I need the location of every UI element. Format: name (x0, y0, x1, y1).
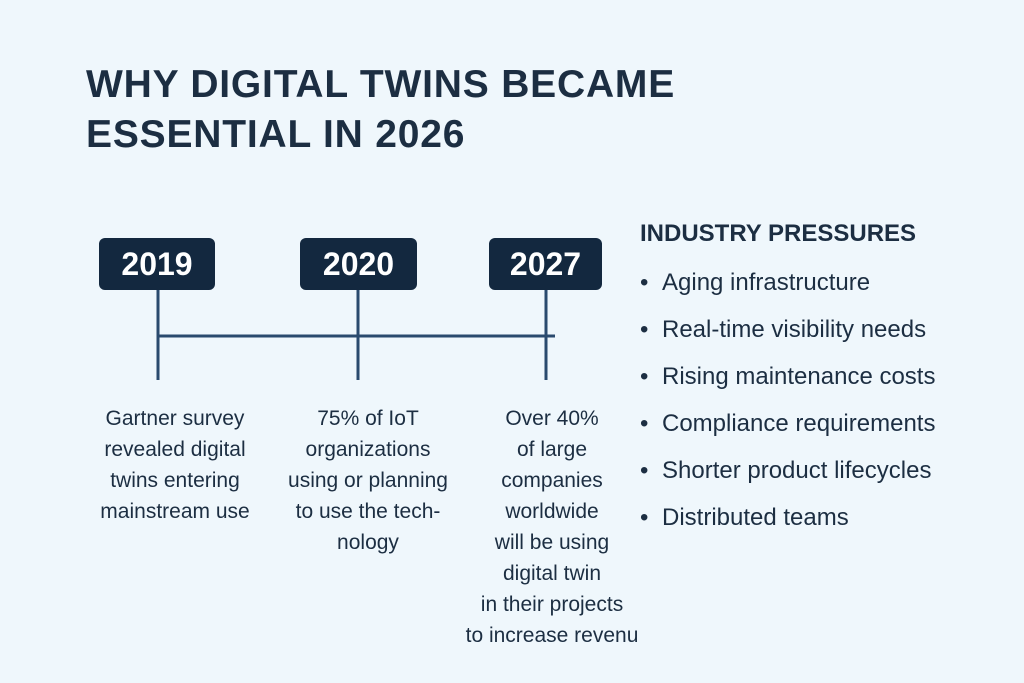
heading: industry pressures: INDUSTRY PRESSURES (640, 220, 916, 247)
text: 2019: mainstream use (100, 500, 250, 523)
text: 2020: nology (337, 531, 399, 554)
text: 2020: using or planning (288, 469, 448, 492)
timeline (156, 290, 555, 380)
title: ESSENTIAL IN 2026 (86, 113, 465, 156)
list: pressures: Distributed teams (662, 504, 849, 531)
year: 2019 (99, 238, 215, 290)
text: 2019: twins entering (110, 469, 240, 492)
text: 2027: to increase revenu (466, 624, 638, 647)
list: pressures: Compliance requirements (662, 410, 935, 437)
text: 2027: will be using (495, 531, 609, 554)
text: 2027: digital twin (503, 562, 601, 585)
list: pressures: Shorter product lifecycles (662, 457, 931, 484)
year: 2027: 2027 (510, 246, 581, 282)
year: 2019: 2019 (121, 246, 193, 282)
text: 2019 (100, 407, 250, 523)
title (86, 63, 675, 156)
list: pressures: Real-time visibility needs (662, 316, 926, 343)
text: 2027 (466, 407, 638, 647)
text: 2020: to use the tech- (296, 500, 440, 523)
year: 2020 (300, 238, 417, 290)
list: pressures (640, 269, 935, 531)
year: 2020: 2020 (323, 246, 394, 282)
timeline lines (156, 290, 555, 380)
text: 2027: of large (517, 438, 587, 461)
text: 2020: 75% of IoT (317, 407, 419, 430)
text: 2027: companies (501, 469, 603, 492)
list: pressures: Aging infrastructure (662, 269, 870, 296)
year: 2027 (489, 238, 602, 290)
text: 2027: Over 40% (505, 407, 599, 430)
text: 2019: revealed digital (104, 438, 246, 461)
title: WHY DIGITAL TWINS BECAME (86, 63, 675, 106)
text: 2027: worldwide (505, 500, 599, 523)
text: 2027: in their projects (481, 593, 623, 616)
text: 2020: organizations (306, 438, 430, 461)
text: 2020 (288, 407, 448, 554)
text: 2019: Gartner survey (106, 407, 244, 430)
list: pressures: Rising maintenance costs (662, 363, 935, 390)
